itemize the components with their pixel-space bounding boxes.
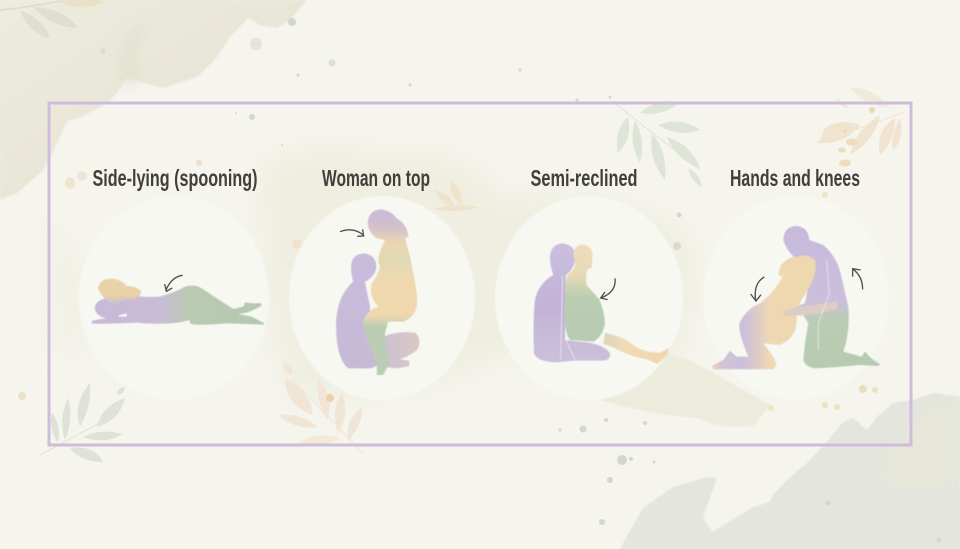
sprig: orange top right xyxy=(817,88,905,155)
arrow xyxy=(340,229,364,236)
background leaf sprigs xyxy=(0,0,905,462)
sprig dots: orange top right xyxy=(838,107,875,166)
heading: Woman on top xyxy=(322,165,430,191)
sprig: top left xyxy=(0,0,105,39)
frame xyxy=(49,103,911,445)
column: Hands and knees xyxy=(703,165,889,400)
figures xyxy=(92,275,264,325)
arrow: left xyxy=(751,277,764,301)
arrow: right xyxy=(853,269,863,289)
sprig: green top xyxy=(617,101,702,187)
sprig: green bottom left xyxy=(40,383,125,462)
figures xyxy=(336,209,419,375)
column: Woman on top xyxy=(289,165,475,400)
figures xyxy=(534,243,669,364)
sprig: orange centre xyxy=(433,180,480,211)
sprig: orange bottom xyxy=(278,363,363,453)
figures xyxy=(712,226,880,369)
column: Side-lying xyxy=(79,165,269,400)
circle xyxy=(703,196,889,400)
heading: Semi-reclined xyxy=(530,165,638,191)
circle xyxy=(79,196,269,400)
circle xyxy=(289,196,475,400)
column: Semi-reclined xyxy=(495,165,683,400)
arrow xyxy=(165,275,183,291)
circle xyxy=(495,196,683,400)
heading: Side-lying (spooning) xyxy=(92,165,258,191)
arrow xyxy=(601,278,615,300)
heading: Hands and knees xyxy=(730,165,860,191)
